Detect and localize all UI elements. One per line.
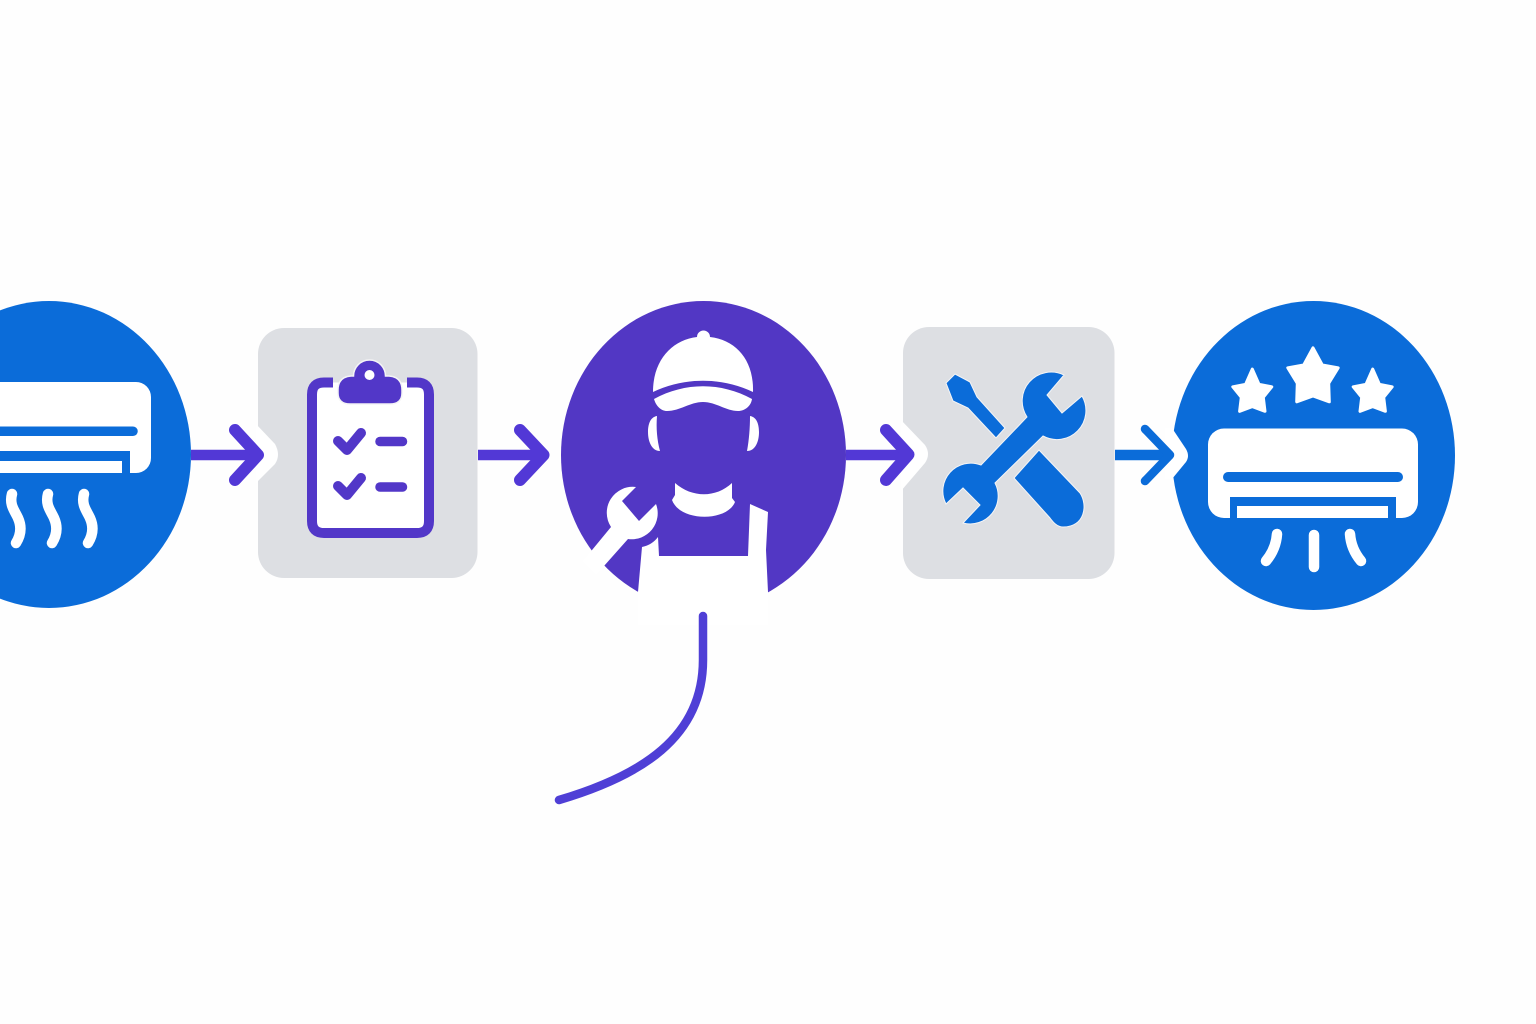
technician cap brim — [654, 386, 752, 411]
arrow: step 1 to checklist — [191, 430, 258, 480]
connector line — [559, 616, 703, 800]
step 5 circle: serviced air conditioner — [1165, 301, 1455, 610]
air flow lines — [1266, 534, 1361, 567]
panel: checklist background — [256, 328, 478, 578]
rating stars — [1233, 348, 1392, 411]
technician wrench — [583, 487, 658, 575]
air conditioner unit — [1208, 428, 1418, 518]
arrow: technician to tools — [846, 430, 908, 480]
technician overalls — [638, 504, 768, 625]
technician cap — [653, 331, 753, 392]
step 3 circle: technician — [561, 301, 846, 625]
icon: clipboard checklist — [312, 360, 429, 533]
panel: tools background — [901, 327, 1114, 579]
arrow: checklist to technician — [478, 430, 544, 480]
arrow: tools to finished unit — [1115, 429, 1170, 481]
step 1 circle: air conditioner with hot air — [0, 301, 191, 608]
notch in circle — [1165, 428, 1188, 479]
technician collar — [672, 483, 735, 517]
icon: crossed wrench and screwdriver — [943, 372, 1086, 527]
technician ears — [648, 416, 759, 451]
